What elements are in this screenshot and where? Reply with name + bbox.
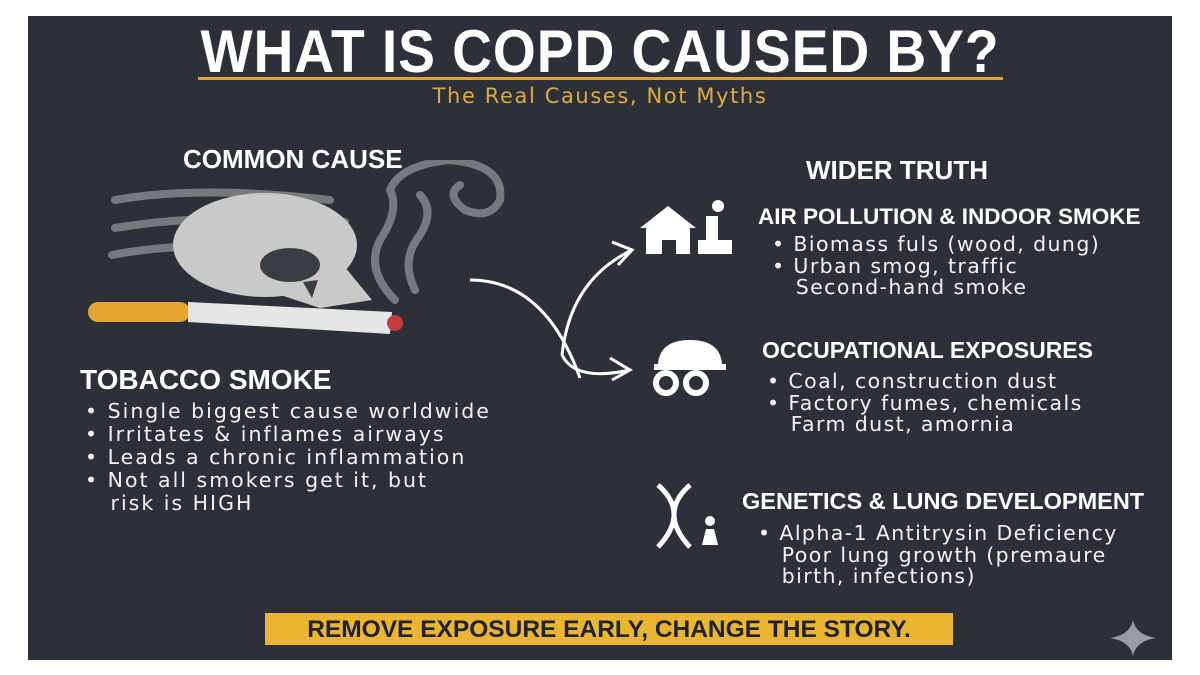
title underline (198, 77, 1003, 80)
text: occupational bullets: • Coal, construction dust (767, 369, 1057, 393)
text: tobacco bullets: • Irritates & inflames airways (85, 422, 446, 446)
icon: helmet and gears (653, 340, 726, 396)
subtitle: The Real Causes, Not Myths (433, 84, 767, 108)
text: genetics bullets: Poor lung growth (premaure (782, 542, 1107, 566)
heading: genetics: GENETICS & LUNG DEVELOPMENT (742, 488, 1144, 514)
callout: bottom banner: REMOVE EXPOSURE EARLY, CHANGE THE STORY. (307, 616, 911, 643)
text: tobacco bullets (85, 399, 491, 515)
text: air bullets: • Urban smog, traffic (772, 254, 1018, 278)
text: occupational bullets: • Factory fumes, chemicals (767, 390, 1083, 414)
icon: skull with cigarette and smoke (88, 160, 504, 334)
text: tobacco bullets: risk is HIGH (111, 491, 253, 515)
icon: sparkle (1110, 620, 1156, 656)
text: tobacco bullets: • Not all smokers get it, but (85, 468, 428, 492)
title: WHAT IS COPD CAUSED BY? (200, 18, 1000, 85)
text: tobacco bullets: • Single biggest cause worldwide (85, 399, 491, 423)
text: genetics bullets: • Alpha-1 Antitrysin Deficiency (758, 521, 1118, 545)
heading: common cause: COMMON CAUSE (183, 144, 403, 174)
text: tobacco bullets: • Leads a chronic inflammation (85, 445, 466, 469)
heading: tobacco smoke: TOBACCO SMOKE (80, 364, 332, 395)
text: air bullets: • Biomass fuls (wood, dung) (772, 232, 1100, 256)
arrows: branching (470, 240, 634, 382)
icon: house and factory (640, 200, 732, 254)
heading: occupational: OCCUPATIONAL EXPOSURES (762, 337, 1093, 363)
text: occupational bullets: Farm dust, amornia (791, 412, 1015, 436)
heading: wider truth: WIDER TRUTH (806, 155, 988, 185)
heading: air pollution: AIR POLLUTION & INDOOR SMOKE (758, 204, 1140, 229)
text: genetics bullets: birth, infections) (782, 564, 976, 588)
text: occupational bullets (767, 369, 1083, 436)
icon: DNA and child (656, 483, 718, 549)
text: air bullets: Second-hand smoke (796, 275, 1027, 299)
text: genetics bullets (758, 521, 1118, 588)
text: air bullets (772, 232, 1100, 299)
